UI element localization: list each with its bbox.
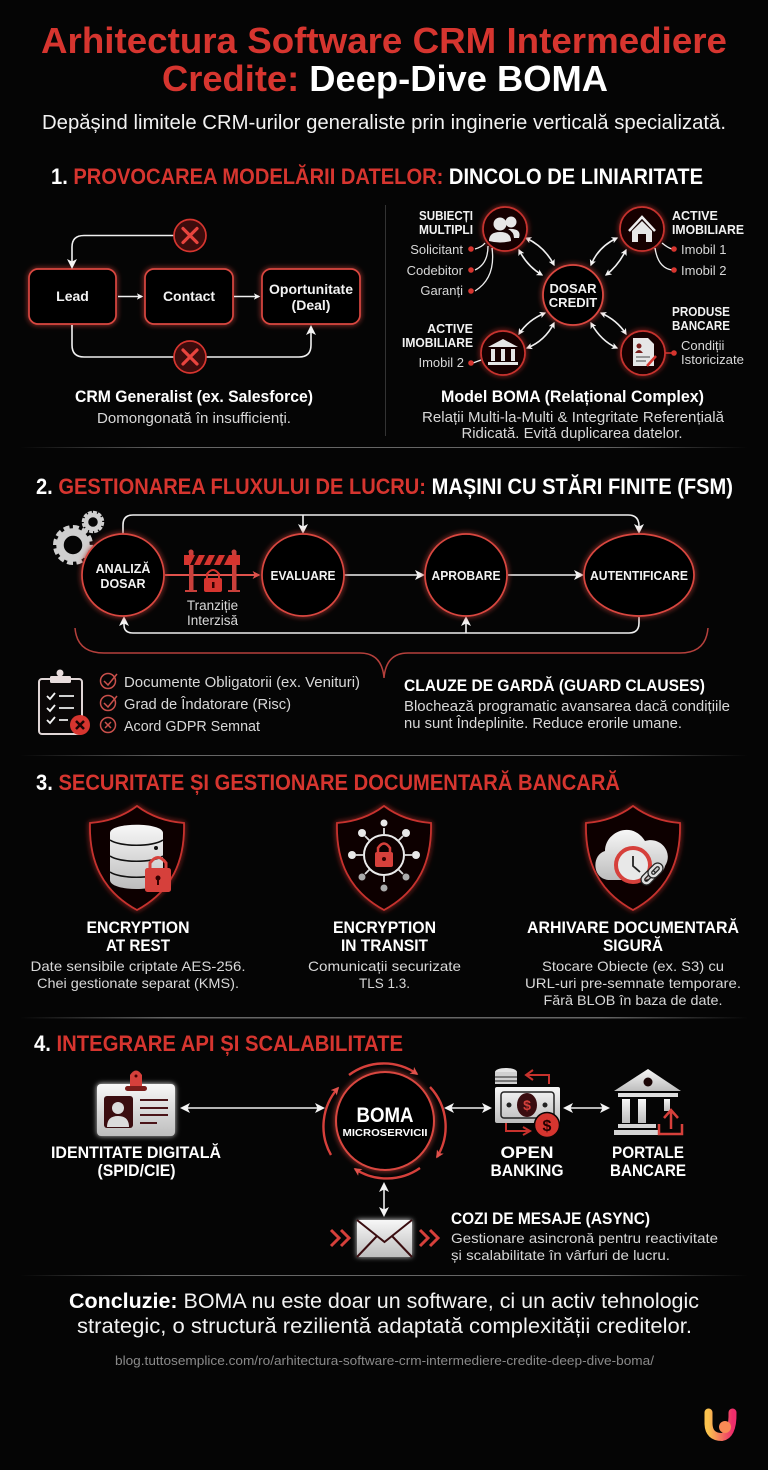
arrow: BOMA to message queue xyxy=(383,1184,385,1215)
label: portale bancare: BANCARE xyxy=(610,1161,686,1180)
state: Evaluare: EVALUARE xyxy=(270,569,336,583)
text: arhivare: SIGURĂ xyxy=(603,936,663,955)
node: BOMA microservicii xyxy=(323,1063,446,1178)
label: identitate digitală: IDENTITATE DIGITALĂ xyxy=(51,1143,221,1162)
panel: CRM generalist diagram xyxy=(29,220,360,427)
text: subiecți multipli: Garanți xyxy=(420,283,463,298)
node: bancă bottom left xyxy=(473,331,525,375)
text: encryption at rest: AT REST xyxy=(106,937,170,955)
vertical divider xyxy=(384,205,386,436)
node: Dosar Credit: DOSAR xyxy=(550,281,597,296)
icon: ID card xyxy=(97,1070,175,1136)
text: produse bancare: Istoricizate xyxy=(681,352,744,367)
label: open banking: BANKING xyxy=(490,1161,564,1180)
text: encryption in transit: TLS 1.3. xyxy=(359,975,410,991)
title: Arhitectura Software CRM Intermediere xyxy=(41,20,727,61)
conclusion xyxy=(69,1290,699,1338)
text: produse bancare: PRODUSE xyxy=(672,305,730,319)
panel: Model BOMA diagram xyxy=(402,207,744,442)
arrow: identity to BOMA xyxy=(182,1107,323,1109)
text: active imobiliare top right xyxy=(671,209,744,278)
text: active imobiliare bottom left xyxy=(402,322,474,370)
text: active imobiliare top right: ACTIVE xyxy=(672,209,718,223)
icon: bank portal xyxy=(614,1069,682,1135)
forbidden transition arrow xyxy=(165,574,259,576)
box: Lead: Lead xyxy=(56,288,89,304)
text: encryption in transit: Comunicații securizate xyxy=(308,958,461,974)
arrow: BOMA to open banking xyxy=(446,1107,490,1109)
state: Evaluare xyxy=(262,534,344,616)
panel: FSM diagram xyxy=(39,512,730,735)
panel: encryption in transit xyxy=(308,806,461,991)
text: subiecți multipli: MULTIPLI xyxy=(419,223,473,237)
subtitle: Depășind limitele CRM-urilor generaliste prin inginerie verticală specializată. xyxy=(42,112,726,134)
text: active imobiliare top right: IMOBILIARE xyxy=(672,223,744,237)
text: arhivare xyxy=(525,918,741,1008)
source URL: blog.tuttosemplice.com/ro/arhitectura-software-crm-intermediere-credite-deep-dive-boma/ xyxy=(115,1354,655,1368)
top transition line xyxy=(123,515,639,534)
text: active imobiliare bottom left: ACTIVE xyxy=(427,322,473,336)
text: encryption at rest: ENCRYPTION xyxy=(86,919,190,937)
box: Oportunitate: Oportunitate xyxy=(269,281,353,297)
icon: shield with cloud and clock xyxy=(586,806,680,910)
text: clauze de gardă: Blochează programatic avansarea dacă condițiile xyxy=(404,699,730,715)
label: portale bancare xyxy=(610,1143,686,1180)
arrow: open banking to portals xyxy=(565,1107,608,1109)
text: cozi de mesaje: Gestionare asincronă pentru reactivitate xyxy=(451,1230,718,1246)
text: encryption in transit: IN TRANSIT xyxy=(341,937,428,955)
logo xyxy=(708,1412,733,1437)
icon: x bottom xyxy=(174,341,206,373)
node: produse bancare xyxy=(621,331,672,375)
label: open banking: OPEN xyxy=(500,1143,554,1162)
heading: section 4: 4. INTEGRARE API ȘI SCALABILITATE xyxy=(34,1031,403,1056)
text: encryption at rest: Chei gestionate separat (KMS). xyxy=(37,975,239,991)
text: cozi de mesaje: și scalabilitate în vârfuri de lucru. xyxy=(451,1247,670,1263)
checklist items: Acord GDPR Semnat xyxy=(124,718,261,735)
panel: encryption at rest xyxy=(30,806,246,991)
text: clauze de gardă: CLAUZE DE GARDĂ (GUARD CLAUSES) xyxy=(404,676,705,695)
state: Analiză Dosar xyxy=(82,534,164,616)
state: Analiză Dosar: DOSAR xyxy=(100,577,146,591)
state: Aprobare: APROBARE xyxy=(432,569,500,583)
label: tranziție interzisă: Tranziție xyxy=(187,598,238,613)
text: cozi de mesaje xyxy=(451,1210,718,1263)
icon: shield with database xyxy=(90,806,184,910)
node: active imobiliare top right xyxy=(620,207,672,270)
bottom arrow to aprobare xyxy=(465,618,467,633)
arrow: rejected skip to deal xyxy=(72,325,311,357)
text: subiecți multipli xyxy=(407,209,474,298)
icon: open banking money xyxy=(495,1068,560,1138)
title xyxy=(41,20,727,99)
brace xyxy=(75,628,708,678)
caption: CRM generalist: Domongonată în insufficienți. xyxy=(97,411,291,427)
text: produse bancare xyxy=(671,305,744,367)
text: subiecți multipli: Solicitant xyxy=(410,242,463,257)
caption: CRM generalist xyxy=(75,388,313,427)
text: subiecți multipli: Codebitor xyxy=(407,263,464,278)
arrows between states xyxy=(344,574,582,576)
arrows between boxes xyxy=(118,296,259,298)
label: identitate digitală xyxy=(51,1143,221,1180)
icon: barrier with lock xyxy=(184,550,240,592)
text: active imobiliare bottom left: IMOBILIARE xyxy=(402,336,473,350)
label: tranziție interzisă: Interzisă xyxy=(187,613,238,628)
checklist items xyxy=(100,674,360,735)
box: Contact xyxy=(145,269,233,324)
box: Oportunitate: (Deal) xyxy=(292,297,330,313)
text: active imobiliare bottom left: Imobil 2 xyxy=(418,355,464,370)
text: arhivare: Fără BLOB în baza de date. xyxy=(544,992,722,1008)
heading: section 2: 2. GESTIONAREA FLUXULUI DE LUCRU: MAȘINI CU STĂRI FINITE (FSM) xyxy=(36,474,733,499)
icon: checklist xyxy=(39,670,90,735)
node: BOMA microservicii: MICROSERVICII xyxy=(342,1128,428,1139)
caption: Model BOMA: Ridicată. Evită duplicarea datelor. xyxy=(462,426,682,442)
caption: Model BOMA: Model BOMA (Relațional Complex) xyxy=(441,387,704,406)
text: encryption in transit: ENCRYPTION xyxy=(333,919,436,937)
box: Lead xyxy=(29,269,116,324)
caption: Model BOMA xyxy=(422,387,725,442)
label: open banking xyxy=(490,1143,564,1180)
caption: CRM generalist: CRM Generalist (ex. Salesforce) xyxy=(75,388,313,406)
text: clauze de gardă xyxy=(404,676,730,732)
node: Dosar Credit: CREDIT xyxy=(549,295,597,310)
text: encryption at rest: Date sensibile criptate AES-256. xyxy=(30,958,246,974)
icon: shield with network lock xyxy=(337,806,431,910)
text: active imobiliare top right: Imobil 1 xyxy=(681,242,727,257)
text: arhivare: ARHIVARE DOCUMENTARĂ xyxy=(527,918,739,937)
icon: gears xyxy=(55,512,103,563)
icon: x top xyxy=(174,220,206,252)
conclusion: Concluzie: BOMA nu este doar un software, ci un activ tehnologic xyxy=(69,1290,699,1313)
box: Contact: Contact xyxy=(163,288,215,304)
state: Autentificare: AUTENTIFICARE xyxy=(590,569,688,583)
panel: API integration diagram xyxy=(51,1063,718,1263)
node: subiecți multipli xyxy=(475,207,527,291)
box: Oportunitate xyxy=(262,269,360,324)
label: portale bancare: PORTALE xyxy=(612,1143,684,1162)
text: encryption in transit xyxy=(308,919,461,991)
checklist items: Documente Obligatorii (ex. Venituri) xyxy=(124,674,360,691)
caption: Model BOMA: Relații Multi-la-Multi & Integritate Referențială xyxy=(422,410,725,426)
state: Autentificare xyxy=(584,534,694,616)
connector arrows to dosar xyxy=(519,238,626,348)
text: encryption at rest xyxy=(30,919,246,991)
text: clauze de gardă: nu sunt Îndeplinite. Reduce erorile umane. xyxy=(404,715,682,732)
panel: arhivare documentară xyxy=(525,806,741,1008)
label: tranziție interzisă xyxy=(187,598,238,628)
heading: section 1: 1. PROVOCAREA MODELĂRII DATELOR: DINCOLO DE LINIARITATE xyxy=(51,164,703,189)
text: active imobiliare top right: Imobil 2 xyxy=(681,263,727,278)
state: Analiză Dosar: ANALIZĂ xyxy=(96,561,150,576)
label: identitate digitală: (SPID/CIE) xyxy=(98,1161,176,1180)
text: produse bancare: BANCARE xyxy=(672,319,730,333)
text: subiecți multipli: SUBIECȚI xyxy=(419,209,473,223)
text: arhivare: URL-uri pre-semnate temporare. xyxy=(525,975,741,991)
arrow: rejected back to lead xyxy=(72,236,174,267)
node: BOMA microservicii: BOMA xyxy=(356,1104,414,1127)
text: produse bancare: Condiții xyxy=(681,338,724,353)
bottom transition line xyxy=(124,617,639,633)
text: arhivare: Stocare Obiecte (ex. S3) cu xyxy=(542,958,724,974)
top arrow to evaluare xyxy=(302,515,304,532)
icon: envelope with chevrons xyxy=(331,1220,438,1257)
icon: open banking money: $ xyxy=(523,1097,531,1113)
text: cozi de mesaje: COZI DE MESAJE (ASYNC) xyxy=(451,1210,650,1228)
icon: open banking money: $ xyxy=(543,1118,552,1135)
checklist items: Grad de Îndatorare (Risc) xyxy=(124,696,291,713)
state: Aprobare xyxy=(425,534,507,616)
node: Dosar Credit xyxy=(543,265,603,325)
conclusion: strategic, o structură rezilientă adaptată complexității creditelor. xyxy=(77,1315,692,1338)
heading: section 3: 3. SECURITATE ȘI GESTIONARE DOCUMENTARĂ BANCARĂ xyxy=(36,770,620,795)
title: Credite: Deep-Dive BOMA xyxy=(162,58,608,99)
